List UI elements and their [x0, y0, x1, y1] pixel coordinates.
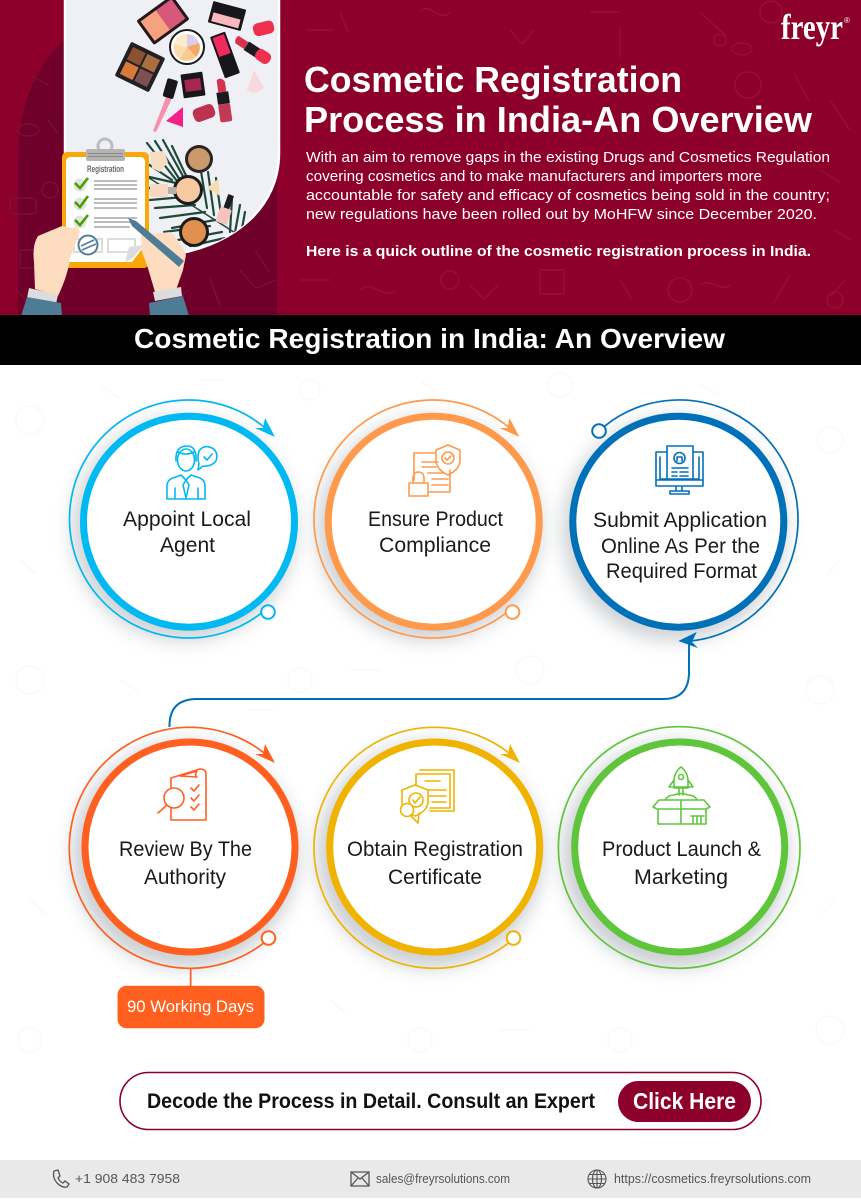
- orbit arrow: [314, 727, 520, 968]
- step label: Online As Per the: [601, 534, 760, 558]
- connector arrow from step 3 to step 4: [170, 644, 689, 727]
- email address: sales@freyrsolutions.com: [376, 1171, 510, 1186]
- section heading band: Cosmetic Registration in India: An Overview: [134, 323, 725, 354]
- outer ring: [558, 727, 800, 968]
- illustration: clipboard and hands: [21, 139, 189, 316]
- step label: Review By The: [119, 837, 252, 861]
- section heading band: [0, 315, 861, 365]
- intro text block: With an aim to remove gaps in the existing Drugs and Cosmetics Regulation: [306, 150, 830, 166]
- call to action: [120, 1072, 761, 1130]
- step label: Compliance: [379, 533, 491, 557]
- panel: header banner: [0, 0, 861, 316]
- icon: compliance document: [409, 445, 460, 496]
- orbit arrow: [70, 400, 275, 638]
- cosmetics items: [115, 0, 275, 132]
- clipboard title: Registration: [87, 164, 124, 175]
- website: https://cosmetics.freyrsolutions.com: [614, 1171, 811, 1186]
- step label: Submit Application: [593, 508, 767, 532]
- checklist: [74, 178, 137, 228]
- badge: 90 working days: 90 Working Days: [127, 997, 254, 1016]
- step 1: appoint local agent: [70, 400, 296, 641]
- step label: Product Launch &: [602, 837, 761, 861]
- step label: Authority: [144, 865, 226, 889]
- step label: Certificate: [388, 865, 482, 889]
- icon: rocket and box: [653, 767, 710, 824]
- duration stem: [190, 968, 192, 986]
- pencil: [128, 218, 184, 267]
- call to action: Decode the Process in Detail. Consult an Expert: [147, 1090, 595, 1113]
- step 3: submit application online: [562, 400, 798, 648]
- title: [304, 59, 813, 140]
- step label: Required Format: [606, 559, 757, 583]
- step label: [602, 837, 761, 889]
- button: click here: Click Here: [633, 1088, 736, 1114]
- title: Cosmetic Registration: [304, 59, 682, 100]
- step label: [347, 837, 523, 889]
- intro text block: covering cosmetics and to make manufacturers and importers more: [306, 169, 762, 185]
- icon: agent: [167, 446, 217, 499]
- right hand: [141, 232, 186, 292]
- intro text block: Here is a quick outline of the cosmetic registration process in India.: [306, 244, 811, 260]
- dark arch behind photo: [18, 36, 277, 316]
- step label: [593, 508, 767, 583]
- logo: freyr: ®: [844, 16, 850, 25]
- step label: Marketing: [634, 865, 728, 889]
- photo panel: cosmetics flat lay: [65, 0, 279, 256]
- step label: [123, 507, 251, 557]
- step label: Agent: [160, 533, 215, 557]
- icon: review document: [158, 769, 206, 820]
- icon: phone: [53, 1170, 69, 1187]
- step 2: ensure product compliance: [314, 400, 541, 641]
- compacts and bottles: [150, 145, 237, 247]
- orbit arrow: [314, 400, 520, 638]
- stamp: [74, 236, 135, 254]
- intro text block: [306, 150, 830, 260]
- badge: 90 working days: [118, 986, 264, 1028]
- left hand: [34, 226, 80, 296]
- intro text block: accountable for safety and efficacy of cosmetics being sold in the country;: [306, 188, 830, 204]
- palm leaf: [142, 140, 245, 246]
- step 5: obtain registration certificate: [314, 727, 543, 968]
- step label: Ensure Product: [368, 507, 503, 531]
- step label: [368, 507, 503, 557]
- title: Process in India-An Overview: [304, 99, 813, 140]
- button: click here: [618, 1081, 751, 1122]
- step label: Obtain Registration: [347, 837, 523, 861]
- phone number: +1 908 483 7958: [75, 1171, 180, 1186]
- step 4: review by the authority: [69, 727, 298, 1028]
- step label: Appoint Local: [123, 507, 251, 531]
- footer bar: [0, 1160, 861, 1198]
- icon: certificate: [400, 770, 454, 823]
- icon: globe: [588, 1170, 606, 1188]
- icon: online application: [656, 446, 703, 494]
- intro text block: new regulations have been rolled out by MoHFW since December 2020.: [306, 207, 817, 223]
- orbit arrow: [69, 727, 275, 968]
- step label: [119, 837, 252, 889]
- logo: freyr: freyr: [781, 7, 843, 47]
- icon: mail: [351, 1172, 369, 1186]
- step 6: product launch and marketing: [558, 727, 800, 968]
- orbit arrow: [592, 400, 798, 648]
